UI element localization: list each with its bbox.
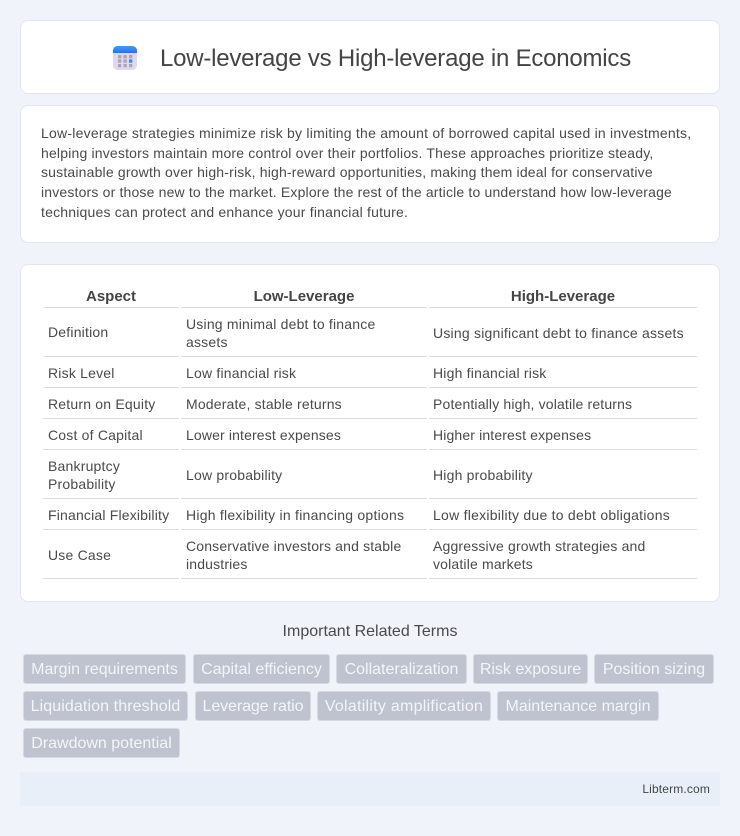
comparison table panel	[20, 264, 720, 602]
header panel	[20, 20, 720, 94]
related terms tags	[23, 654, 714, 758]
row: cost of capital: Lower interest expenses	[186, 427, 341, 443]
tag: Collateralization	[345, 661, 458, 678]
tag	[23, 728, 180, 758]
row: cost of capital: Cost of Capital	[48, 427, 143, 443]
tag: Capital efficiency	[201, 661, 322, 678]
related terms heading: Important Related Terms	[283, 623, 457, 640]
tag	[497, 691, 659, 721]
tag: Volatility amplification	[325, 698, 483, 715]
row: return on equity	[48, 396, 632, 412]
table header	[86, 288, 615, 305]
row: return on equity: Moderate, stable returns	[186, 396, 342, 412]
row: bankruptcy probability: Low probability	[186, 467, 282, 483]
row: bankruptcy probability	[48, 458, 533, 492]
row: use case: Use Case	[48, 547, 111, 563]
tag	[23, 654, 186, 684]
row: definition: assets	[186, 334, 228, 350]
row: use case: Aggressive growth strategies and	[433, 538, 645, 554]
tag: Leverage ratio	[203, 698, 303, 715]
tag: Maintenance margin	[506, 698, 650, 715]
comparison table	[43, 288, 697, 579]
row: cost of capital	[48, 427, 591, 443]
intro text	[41, 125, 691, 220]
tag	[336, 654, 467, 684]
tag: Risk exposure	[480, 661, 581, 678]
row: risk level: Risk Level	[48, 365, 115, 381]
row: financial flexibility: High flexibility in financing options	[186, 507, 404, 523]
tag: Margin requirements	[31, 661, 178, 678]
row: cost of capital: Higher interest expenses	[433, 427, 591, 443]
intro text: Low-leverage strategies minimize risk by limiting the amount of borrowed capital used in investments,	[41, 125, 691, 141]
row: use case: volatile markets	[433, 556, 533, 572]
table header: High-Leverage	[511, 288, 615, 305]
tag	[23, 691, 188, 721]
table header: Aspect	[86, 288, 136, 305]
intro text: sustainable growth over high-risk, high-reward opportunities, making them ideal for conservative	[41, 164, 653, 180]
table header: Low-Leverage	[254, 288, 354, 305]
tag: Position sizing	[603, 661, 705, 678]
row: risk level: High financial risk	[433, 365, 547, 381]
row: definition: Definition	[48, 324, 108, 340]
tag: Liquidation threshold	[31, 698, 180, 715]
tag	[594, 654, 714, 684]
row: use case: Conservative investors and stable	[186, 538, 401, 554]
tag	[195, 691, 311, 721]
row: definition: Using significant debt to finance assets	[433, 325, 684, 341]
footer credit: Libterm.com	[642, 782, 710, 796]
tag	[193, 654, 330, 684]
row: financial flexibility: Financial Flexibility	[48, 507, 169, 523]
row: bankruptcy probability: High probability	[433, 467, 533, 483]
row: financial flexibility	[48, 507, 670, 523]
row: return on equity: Return on Equity	[48, 396, 155, 412]
row: bankruptcy probability: Probability	[48, 476, 116, 492]
row: risk level	[48, 365, 547, 381]
row: financial flexibility: Low flexibility due to debt obligations	[433, 507, 670, 523]
row: bankruptcy probability: Bankruptcy	[48, 458, 120, 474]
intro panel	[20, 105, 720, 243]
intro text: investors or those new to the market. Explore the rest of the article to understand how low-leverage	[41, 184, 672, 200]
row: return on equity: Potentially high, volatile returns	[433, 396, 632, 412]
row: use case: industries	[186, 556, 248, 572]
intro text: techniques can protect and enhance your financial future.	[41, 204, 408, 220]
footer bar	[20, 772, 720, 806]
intro text: helping investors maintain more control over their portfolios. These approaches prioritize steady,	[41, 145, 653, 161]
row: use case	[48, 538, 645, 572]
tag	[317, 691, 491, 721]
tag	[473, 654, 588, 684]
title: Low-leverage vs High-leverage in Economics	[160, 45, 631, 72]
row: definition	[48, 316, 684, 350]
icon: calendar	[113, 46, 137, 70]
row: risk level: Low financial risk	[186, 365, 296, 381]
tag: Drawdown potential	[31, 735, 172, 752]
row: definition: Using minimal debt to finance	[186, 316, 375, 332]
